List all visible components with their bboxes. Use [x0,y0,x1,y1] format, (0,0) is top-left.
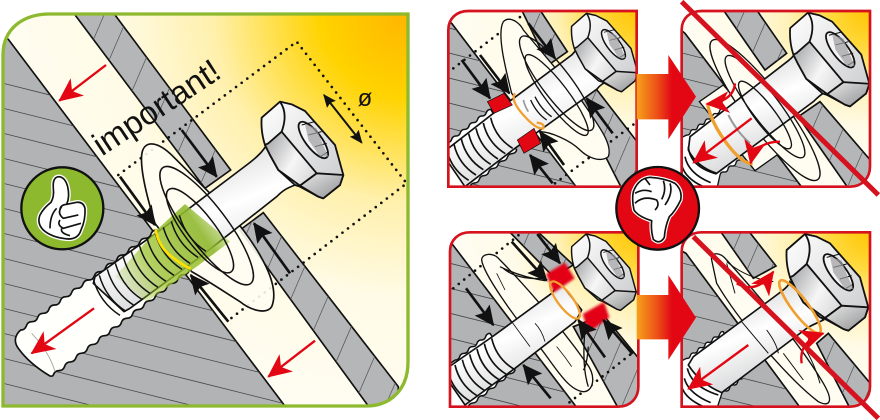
washer [141,144,274,311]
label: important: important! [85,52,227,163]
bolt head [261,102,343,198]
panel: correct installation [0,10,410,413]
washer rings [159,166,254,286]
arrow: top connector [637,55,696,139]
insulation band upper [73,13,231,188]
dotted outline [118,42,407,322]
panel: bottom left [443,230,640,410]
yellow ring [156,229,191,269]
label: diameter: ø [358,85,373,112]
black pressure arrows [120,95,362,322]
red strike-through bottom [693,237,878,418]
red strike-through top [682,2,878,195]
dowel sleeve [451,332,516,406]
panel: top left [443,10,640,200]
thread lines [93,215,206,315]
panel group: top row [443,2,878,200]
green highlight [115,204,230,302]
insulation band lower [240,213,398,408]
bolt shaft and threads [93,145,295,312]
border [3,14,408,406]
dowel end [680,108,740,190]
panel: bottom right [677,230,872,410]
dowel sleeve [450,108,518,186]
icon: thumbs up [21,167,103,249]
red direction arrows [32,65,315,377]
bolt shaft and threads [447,42,607,187]
panel group: bottom row [443,230,878,418]
dowel end [680,332,742,409]
icon: thumbs down [616,167,699,250]
panel: top right [677,10,872,200]
dowel body [15,230,189,376]
wall: grey masonry [0,33,287,408]
arrow: bottom connector [637,275,696,360]
